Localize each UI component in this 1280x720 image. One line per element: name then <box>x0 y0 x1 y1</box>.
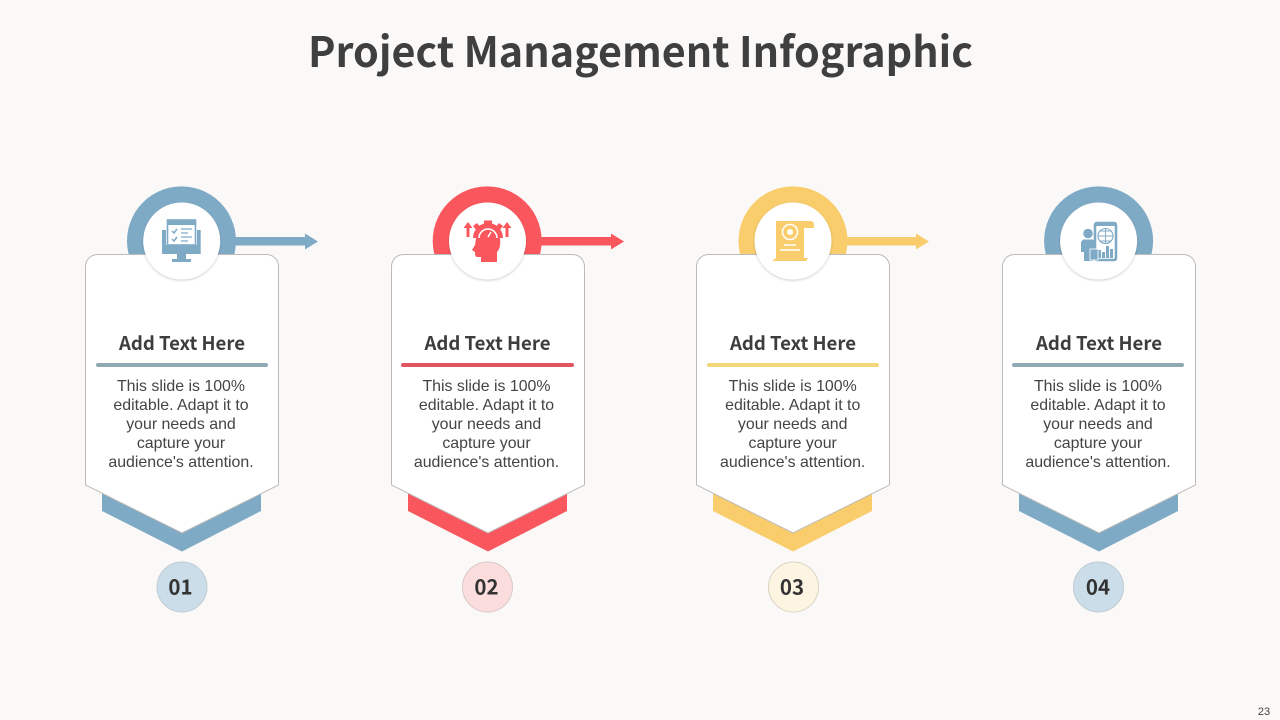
body text: This slide is 100% <box>422 378 551 395</box>
body text: capture your <box>749 435 838 452</box>
panel: step 01 <box>86 186 318 612</box>
divider <box>707 363 879 367</box>
body text: your needs and <box>738 416 847 433</box>
body text: capture your <box>1054 435 1143 452</box>
body text: audience's attention. <box>414 454 559 471</box>
ring <box>738 186 848 254</box>
body text: your needs and <box>126 416 236 433</box>
icon: head with gear <box>464 220 512 262</box>
number badge <box>1074 562 1124 612</box>
body text: editable. Adapt it to <box>419 397 554 414</box>
card <box>392 254 584 533</box>
icon circle <box>1060 202 1137 280</box>
chevron <box>102 490 261 552</box>
panel: step 04 <box>1002 186 1196 612</box>
number badge: 01 <box>168 570 193 600</box>
number badge: 02 <box>474 570 499 600</box>
icon circle <box>449 202 526 280</box>
body text: This slide is 100% <box>1034 378 1162 395</box>
body text: editable. Adapt it to <box>113 397 249 414</box>
body text: capture your <box>442 435 531 452</box>
arrow <box>845 234 929 250</box>
heading: Add Text Here <box>729 329 856 356</box>
body text: This slide is 100% <box>117 378 245 395</box>
title: Project Management Infographic <box>308 19 973 80</box>
ring <box>127 186 236 254</box>
body text: This slide is 100% <box>729 378 857 395</box>
number badge <box>768 562 818 612</box>
ring <box>1044 186 1153 254</box>
arrow <box>540 234 624 250</box>
divider <box>401 363 574 367</box>
number badge <box>157 562 207 612</box>
number badge: 04 <box>1086 570 1110 600</box>
body text: audience's attention. <box>720 454 865 471</box>
icon: monitor checklist <box>162 220 201 262</box>
heading: Add Text Here <box>424 329 550 356</box>
chevron <box>713 490 872 552</box>
icon: scroll with seal <box>772 221 814 261</box>
heading: Add Text Here <box>1035 329 1162 356</box>
card <box>696 254 890 533</box>
body text: your needs and <box>1043 416 1153 433</box>
card <box>1002 254 1196 533</box>
chevron <box>1019 490 1178 552</box>
body text: audience's attention. <box>1025 454 1171 471</box>
icon: person and phone analytics <box>1081 223 1116 261</box>
icon circle <box>143 202 220 280</box>
body text: capture your <box>137 435 226 452</box>
body text: editable. Adapt it to <box>1030 397 1166 414</box>
divider <box>1012 363 1184 367</box>
number badge: 03 <box>780 570 804 600</box>
body text: editable. Adapt it to <box>725 397 860 414</box>
page number: 23 <box>1258 706 1270 718</box>
panel: step 02 <box>392 186 624 612</box>
chevron <box>408 490 567 552</box>
number badge <box>462 562 512 612</box>
divider <box>96 363 268 367</box>
arrow <box>234 234 318 250</box>
heading: Add Text Here <box>118 329 245 356</box>
icon circle <box>754 202 832 280</box>
body text: your needs and <box>432 416 541 433</box>
card <box>86 254 278 533</box>
ring <box>433 186 542 254</box>
panel: step 03 <box>696 186 929 612</box>
body text: audience's attention. <box>108 454 254 471</box>
